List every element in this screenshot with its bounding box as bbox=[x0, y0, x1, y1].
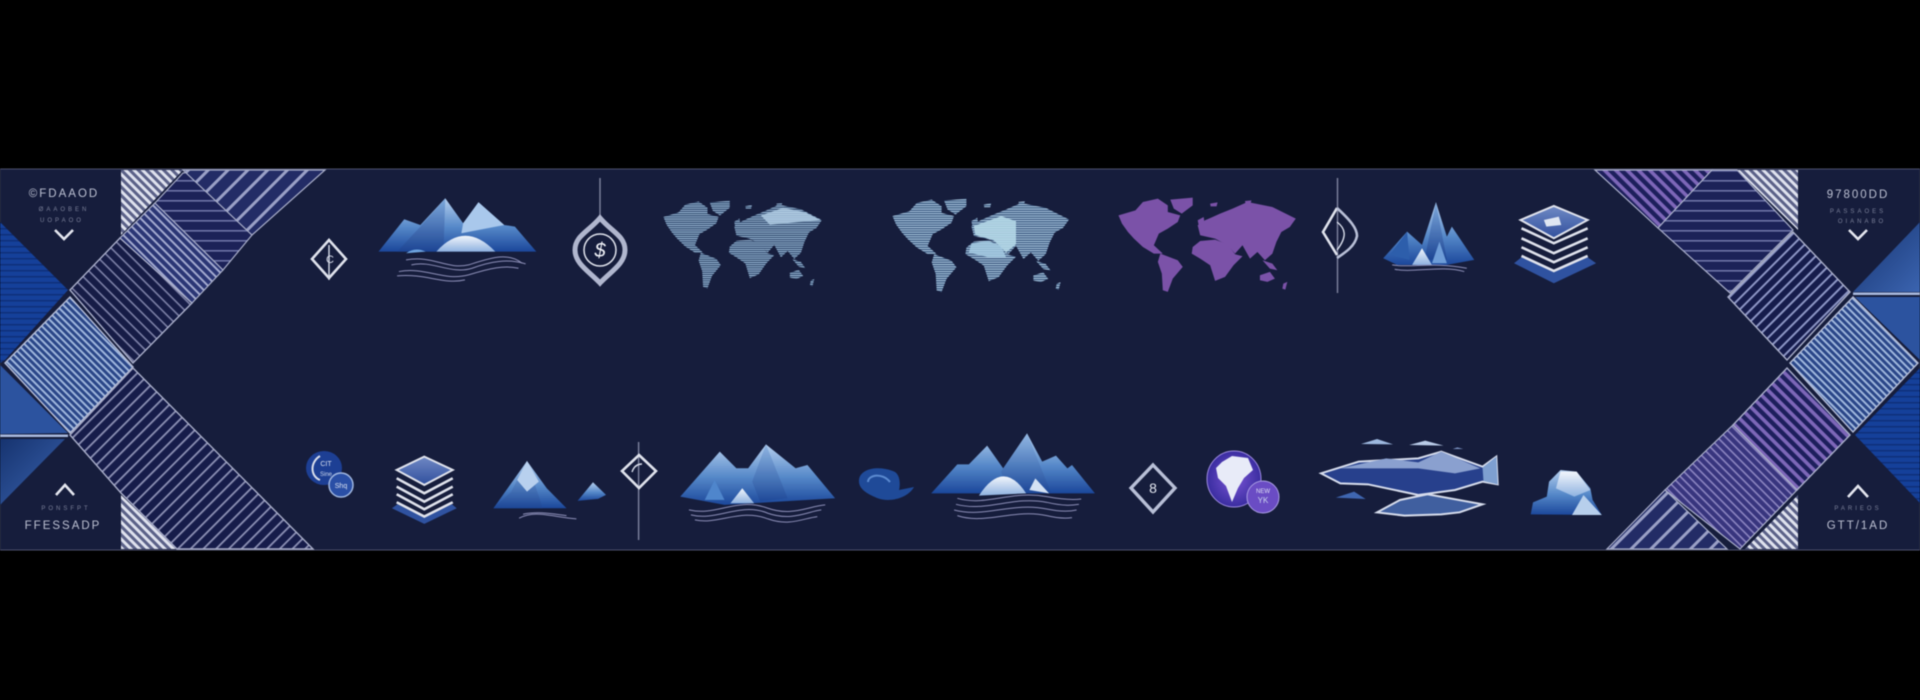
label bottom left bbox=[25, 485, 101, 532]
central striped diamond left bbox=[5, 297, 133, 433]
icon: two coins: Sine bbox=[320, 472, 333, 478]
world map purple bbox=[1118, 198, 1296, 292]
left corner lattice bbox=[0, 170, 325, 549]
icon: mountain 3 with mini peak bbox=[493, 461, 606, 519]
stripe cell band up 2 bbox=[120, 203, 223, 303]
icon: diamond with eight: 8 bbox=[1149, 480, 1157, 496]
violet stripe cell lower bbox=[1665, 425, 1797, 549]
white striped triangle bottom left bbox=[121, 495, 177, 549]
label top left: ©FDAAOD bbox=[29, 188, 99, 200]
icon: diamond emblem top left bbox=[312, 240, 346, 280]
blue triangle lower left bbox=[0, 439, 65, 505]
blue triangle upper left bbox=[0, 222, 68, 363]
icon: purple globes: YK bbox=[1258, 496, 1269, 505]
icon: layered stack top right bbox=[1514, 206, 1596, 283]
icon: wave swirl bbox=[859, 468, 914, 500]
label top left bbox=[29, 188, 99, 239]
central striped diamond right bbox=[1790, 297, 1918, 432]
light divider left bbox=[0, 434, 68, 437]
background panel bbox=[0, 169, 1920, 550]
dark stripe cell corner bbox=[1607, 490, 1727, 549]
white striped triangle bottom right bbox=[1745, 495, 1798, 549]
icon: two coins: Shq bbox=[335, 483, 347, 490]
label bottom right bbox=[1827, 486, 1889, 532]
label top left: ØAAOBEN bbox=[39, 207, 89, 213]
icon: mountain spire 2 bbox=[1383, 202, 1474, 272]
icon: diamond emblem top left: C bbox=[326, 254, 334, 266]
world map dotted 1 bbox=[663, 201, 822, 288]
icon: dollar pendant: $ bbox=[593, 240, 606, 262]
blue triangle mid left bbox=[0, 365, 68, 434]
label bottom right: GTT/1AD bbox=[1827, 520, 1889, 532]
purple stripes top bbox=[1595, 170, 1712, 228]
icon: mountain 5 with waves bbox=[931, 433, 1095, 519]
blue triangle mid right bbox=[1855, 297, 1920, 360]
stripe cell band up 3 bbox=[155, 170, 252, 270]
blue striped triangle lower right bbox=[1855, 368, 1920, 503]
label top right: PASSAOES bbox=[1830, 209, 1886, 215]
icon: purple globes bbox=[1207, 451, 1279, 513]
dark stripe cell right bbox=[1728, 232, 1850, 360]
icon: dollar pendant bbox=[575, 178, 625, 283]
label top right: OIANABO bbox=[1838, 219, 1886, 225]
label top left: UOPAOO bbox=[40, 218, 84, 224]
stripe cell band up 1 bbox=[70, 238, 192, 363]
icon: diamond on vertical line bbox=[622, 442, 656, 540]
purple stripe cell lower bbox=[1733, 368, 1850, 490]
right corner lattice bbox=[1595, 170, 1920, 549]
icon: whale shape with fish bbox=[1321, 439, 1498, 516]
icon: mountain with waves 1 bbox=[379, 198, 536, 281]
blue triangle top right bbox=[1853, 222, 1920, 292]
label top right: 97800DD bbox=[1827, 189, 1889, 201]
white striped triangle top right bbox=[1737, 170, 1798, 230]
label top right bbox=[1827, 189, 1889, 239]
light divider right bbox=[1853, 292, 1920, 295]
stripe cell band up 4 bbox=[183, 170, 325, 235]
white striped triangle top left bbox=[121, 170, 183, 235]
icon: diamond with eight bbox=[1131, 465, 1175, 512]
icon: purple globes: NEW bbox=[1256, 489, 1270, 495]
label bottom left: PONSFPT bbox=[41, 506, 91, 512]
icon: two coins bbox=[306, 451, 353, 497]
label bottom left: FFESSADP bbox=[25, 520, 101, 532]
icon: iceberg bbox=[1531, 470, 1602, 515]
label bottom right: PARIEOS bbox=[1834, 506, 1882, 512]
lower stripe band left bbox=[70, 368, 313, 549]
icon: two coins: CIT bbox=[320, 461, 332, 468]
blue horizontal striped cell bbox=[1658, 170, 1793, 293]
icon: split diamond on vertical line bbox=[1323, 178, 1357, 293]
world map dotted 2 bbox=[892, 199, 1069, 292]
icon: layered stack bottom left bbox=[392, 457, 457, 524]
icon: mountain 4 with waves bbox=[680, 444, 835, 522]
